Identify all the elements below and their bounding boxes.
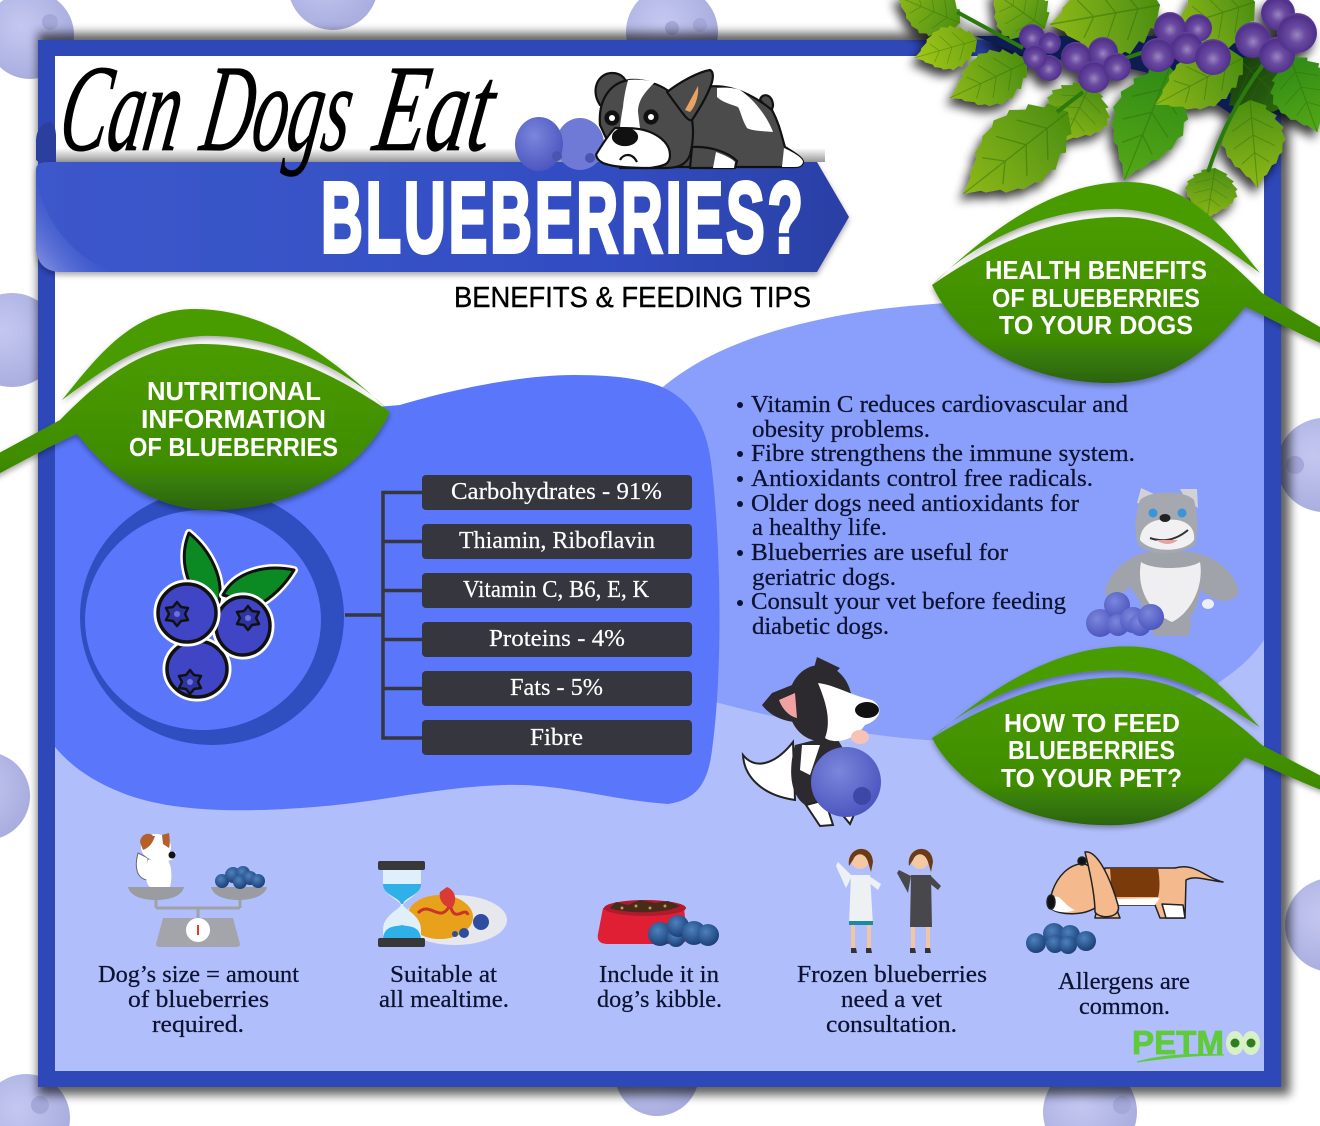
- subtitle: BENEFITS & FEEDING TIPS: [454, 282, 811, 314]
- caption: Include it in: [599, 962, 719, 988]
- icon: grey bulldog with berries: [1086, 488, 1239, 637]
- leaf banner: health benefits: HEALTH BENEFITS: [985, 255, 1207, 285]
- health benefits list: obesity problems.: [752, 417, 930, 443]
- leaf banner: health benefits: OF BLUEBERRIES: [992, 283, 1200, 313]
- health benefits list: a healthy life.: [752, 515, 887, 541]
- leaf banner: health benefits: [932, 182, 1320, 383]
- caption: Allergens are: [1058, 969, 1190, 995]
- health benefits list: Vitamin C reduces cardiovascular and: [751, 392, 1128, 418]
- caption: Frozen blueberries: [797, 962, 987, 988]
- health benefits list: Fibre strengthens the immune system.: [751, 441, 1135, 467]
- caption: consultation.: [826, 1012, 957, 1038]
- health benefits list: [737, 392, 1135, 640]
- leaf banner: nutritional information: OF BLUEBERRIES: [129, 432, 338, 462]
- step 1: scale: [98, 833, 299, 1038]
- caption: all mealtime.: [379, 987, 509, 1013]
- dark backing shade: [975, 36, 1283, 130]
- logo: PETMOO: [1132, 1024, 1260, 1062]
- bar: thiamin: [422, 524, 692, 559]
- leaf banner: how to feed: BLUEBERRIES: [1008, 735, 1175, 765]
- step 3: kibble: [597, 900, 722, 1013]
- icon: two blueberries by title: [515, 117, 604, 171]
- bar: proteins: Proteins - 4%: [489, 626, 625, 652]
- step 5: allergens: [1026, 852, 1223, 1020]
- logo: PETMOO: PETM: [1132, 1024, 1224, 1061]
- health benefits list: Consult your vet before feeding: [751, 589, 1066, 615]
- caption: Dog’s size = amount: [98, 962, 299, 988]
- nutrient bars: [422, 475, 692, 755]
- nutrition blue area: [55, 375, 720, 810]
- caption: [797, 962, 987, 1038]
- title: BLUEBERRIES?: BLUEBERRIES?: [321, 163, 803, 274]
- leaf banner: nutritional information: NUTRITIONAL: [147, 376, 321, 406]
- leaf banner: health benefits: TO YOUR DOGS: [999, 310, 1193, 340]
- leaf banner: nutritional information: [0, 309, 390, 510]
- caption: dog’s kibble.: [597, 987, 722, 1013]
- leaf banner: how to feed: [932, 646, 1320, 825]
- icon: hourglass: [378, 861, 425, 947]
- bar: thiamin: Thiamin, Riboflavin: [459, 528, 655, 554]
- health benefits list: Antioxidants control free radicals.: [751, 466, 1093, 492]
- icon: resting bulldog: [596, 70, 803, 168]
- title: Can Dogs Eat: [52, 40, 507, 177]
- blueberry medallion: [80, 489, 344, 745]
- lower light blue area: [55, 640, 1264, 1071]
- bar: carbohydrates: [422, 475, 692, 510]
- caption: common.: [1079, 994, 1170, 1020]
- icon: dog on weighing scale: [128, 833, 267, 947]
- top-right blueberry branch: [886, 0, 1320, 225]
- step 4: vet consultation: [797, 849, 987, 1038]
- bar: fibre: Fibre: [530, 725, 583, 751]
- step 2: mealtime: [378, 861, 509, 1013]
- bar: vitamins: [422, 573, 692, 608]
- caption: [1058, 969, 1190, 1020]
- title: Can Dogs Eat: Dogs: [193, 40, 363, 177]
- title: Can Dogs Eat: Can: [52, 40, 193, 177]
- berries: [1019, 0, 1317, 93]
- icon: collie holding blueberry: [743, 657, 881, 826]
- caption: Suitable at: [390, 962, 497, 988]
- stems: [957, 12, 1263, 172]
- health benefits blue area: [640, 297, 1264, 742]
- bar: vitamins: Vitamin C, B6, E, K: [463, 577, 650, 603]
- icon: basset hound with berries: [1047, 852, 1223, 918]
- leaf banner: how to feed: HOW TO FEED: [1004, 708, 1180, 738]
- health benefits list: diabetic dogs.: [752, 614, 889, 640]
- bar: fats: [422, 671, 692, 706]
- health benefits list: Blueberries are useful for: [751, 540, 1008, 566]
- caption: of blueberries: [128, 987, 269, 1013]
- bar: proteins: [422, 622, 692, 657]
- ring: [80, 489, 344, 745]
- icon: allergy blueberries: [1026, 923, 1096, 954]
- leaf banner: nutritional information: INFORMATION: [141, 404, 326, 434]
- leaf banner: how to feed: TO YOUR PET?: [1001, 763, 1182, 793]
- nutrient connector tree: [345, 492, 422, 738]
- leaves: [886, 0, 1320, 225]
- icon: dog bowl with berries: [598, 900, 719, 947]
- caption: [597, 962, 722, 1013]
- bar: carbohydrates: Carbohydrates - 91%: [451, 479, 662, 505]
- caption: [379, 962, 509, 1013]
- bar: fats: Fats - 5%: [510, 675, 603, 701]
- icon: vet and client on phones: [836, 849, 941, 953]
- icon: blueberry cluster: [158, 533, 294, 697]
- caption: need a vet: [841, 987, 942, 1013]
- caption: required.: [152, 1012, 244, 1038]
- bar: fibre: [422, 720, 692, 755]
- health benefits list: geriatric dogs.: [752, 565, 896, 591]
- caption: [98, 962, 299, 1038]
- health benefits list: Older dogs need antioxidants for: [751, 491, 1079, 517]
- title: Can Dogs Eat: Eat: [365, 40, 507, 177]
- icon: plate of pancakes: [403, 887, 507, 945]
- title banner: [36, 122, 849, 272]
